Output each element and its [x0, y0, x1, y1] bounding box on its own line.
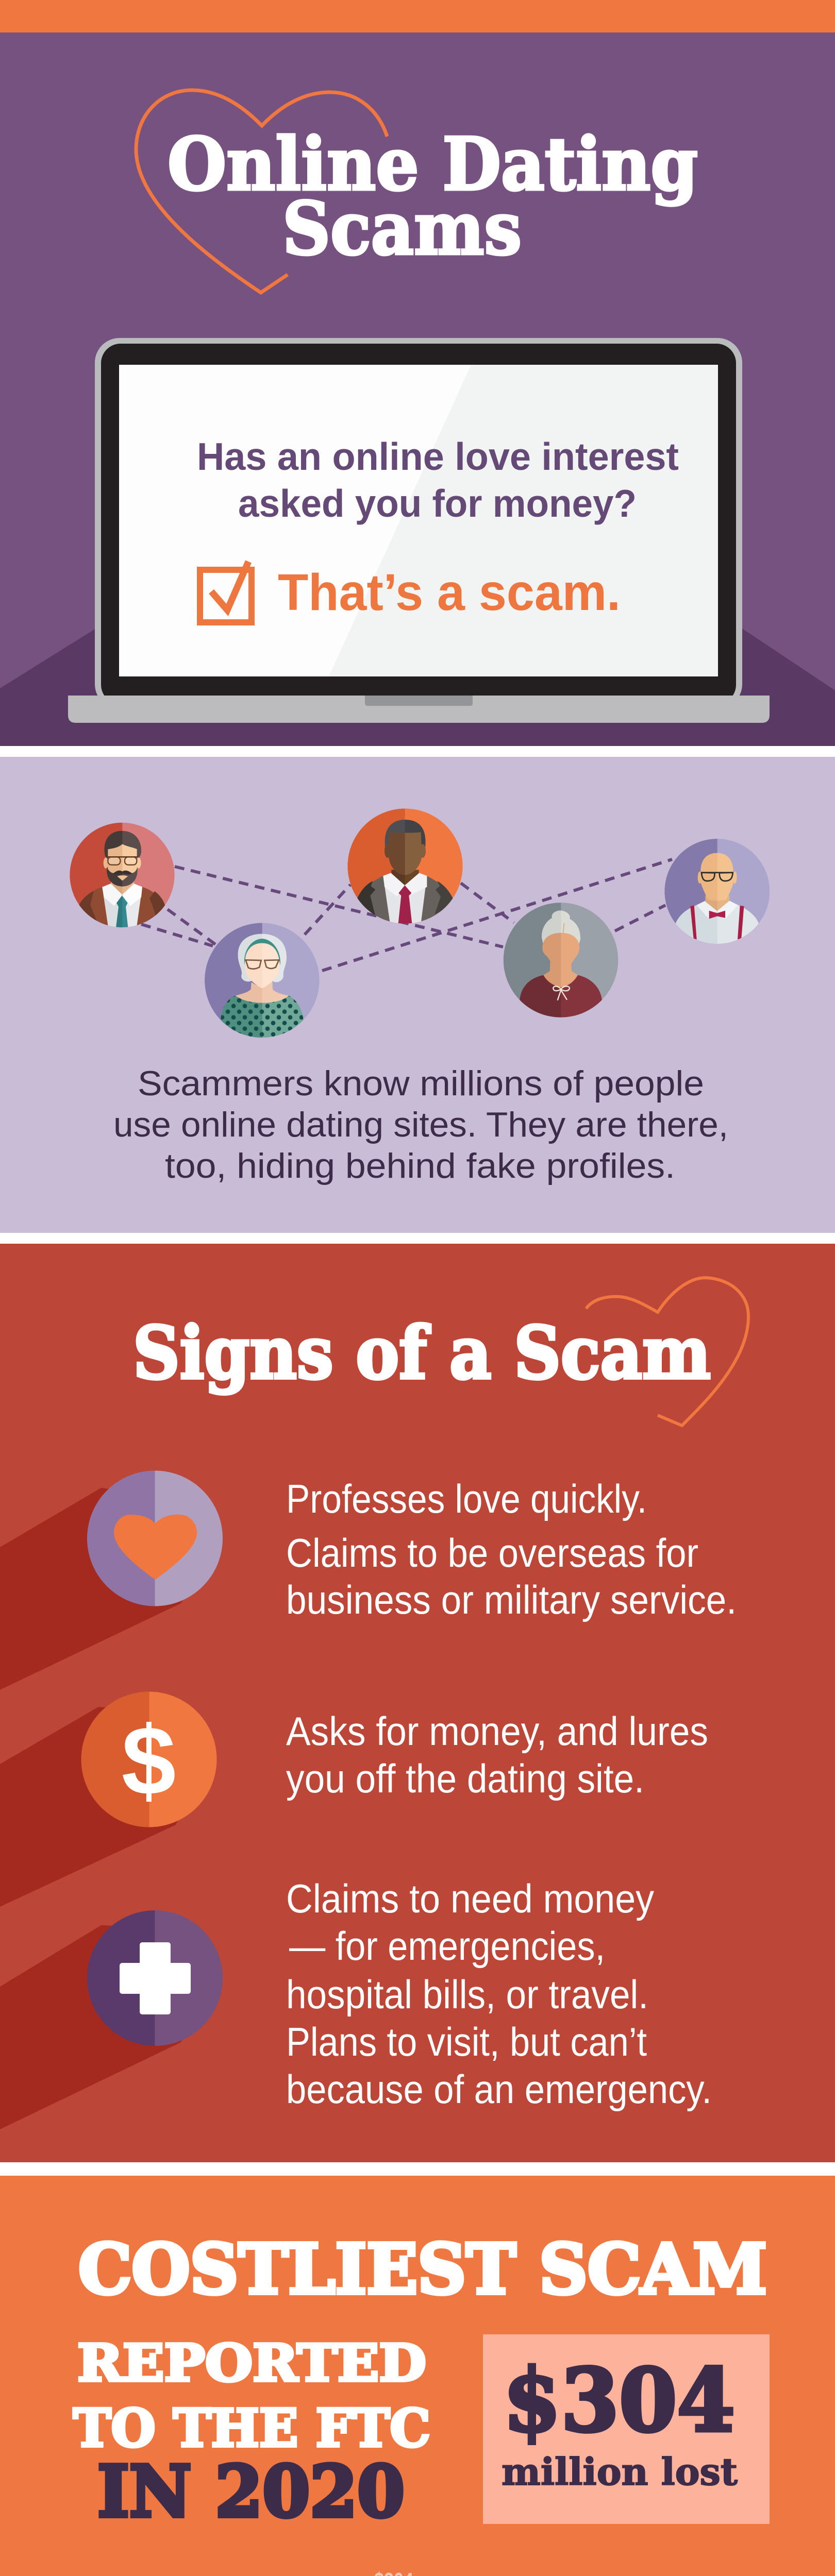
sign 2 text: you off the dating site.	[286, 1756, 644, 1801]
callout: $304 million lost	[483, 2334, 770, 2524]
sign 1 text	[286, 1476, 737, 1622]
sign 1 text: Claims to be overseas for	[286, 1530, 698, 1575]
icon: avatar woman with grey bun	[504, 903, 618, 1019]
callout: that's a scam: That’s a scam.	[278, 564, 621, 621]
title	[168, 122, 698, 272]
heading: Signs of a Scam	[133, 1311, 711, 1396]
sign 3 text: — for emergencies,	[289, 1923, 605, 1969]
icon: avatar bearded man	[70, 823, 175, 927]
reported to the FTC	[73, 2334, 430, 2533]
callout: $304 million lost: $304	[503, 2349, 735, 2451]
title: Scams	[282, 187, 522, 272]
reported to the FTC: REPORTED	[77, 2334, 426, 2393]
reported to the FTC: TO THE FTC	[73, 2398, 430, 2459]
sign 3 text: because of an emergency.	[286, 2066, 712, 2112]
sign 1 text: business or military service.	[286, 1577, 737, 1622]
icon: dollar badge	[81, 1692, 216, 1827]
top orange band	[0, 0, 835, 32]
icon: dollar badge: $	[122, 1706, 176, 1816]
panel: scammers and profiles	[0, 757, 835, 1233]
sign 2 text	[286, 1708, 708, 1801]
sign 1 text: Professes love quickly.	[286, 1476, 647, 1521]
intro text: too, hiding behind fake profiles.	[165, 1146, 675, 1185]
sign 3 text: Claims to need money	[286, 1876, 654, 1921]
icon: heart badge	[87, 1470, 223, 1606]
icon: avatar woman with glasses and polka dot top	[205, 923, 320, 1039]
icon: orange checkbox	[200, 562, 252, 622]
icon: avatar man in dark suit	[347, 808, 463, 924]
panel: hero	[0, 32, 835, 746]
panel: signs of a scam	[0, 1244, 835, 2162]
sign 3 text	[286, 1876, 712, 2112]
intro text: use online dating sites. They are there,	[113, 1105, 728, 1144]
icon: laptop	[68, 338, 770, 723]
heading: COSTLIEST SCAM	[78, 2229, 767, 2310]
callout: $304 million lost: million lost	[502, 2450, 738, 2494]
intro text: Scammers know millions of people	[138, 1064, 704, 1103]
icon: heading heart outline	[586, 1278, 748, 1426]
screen question text: Has an online love interest	[197, 435, 679, 478]
long shadows	[0, 1488, 216, 2129]
sign 3 text: Plans to visit, but can’t	[286, 2019, 647, 2064]
sign 2 text: Asks for money, and lures	[286, 1708, 708, 1754]
title: Online Dating	[168, 122, 698, 207]
intro text	[113, 1064, 728, 1185]
reported to the FTC: IN 2020	[97, 2450, 405, 2533]
dashed connection lines	[141, 859, 672, 971]
table surface	[0, 629, 835, 746]
panel: costliest scam	[0, 2176, 835, 2576]
sign 3 text: hospital bills, or travel.	[286, 1972, 648, 2017]
screen question text	[197, 435, 679, 525]
icon: medical cross badge	[87, 1910, 223, 2046]
screen question text: asked you for money?	[238, 482, 637, 525]
icon: avatar bald man with bow tie	[664, 839, 770, 945]
icon: title heart outline	[136, 90, 387, 293]
